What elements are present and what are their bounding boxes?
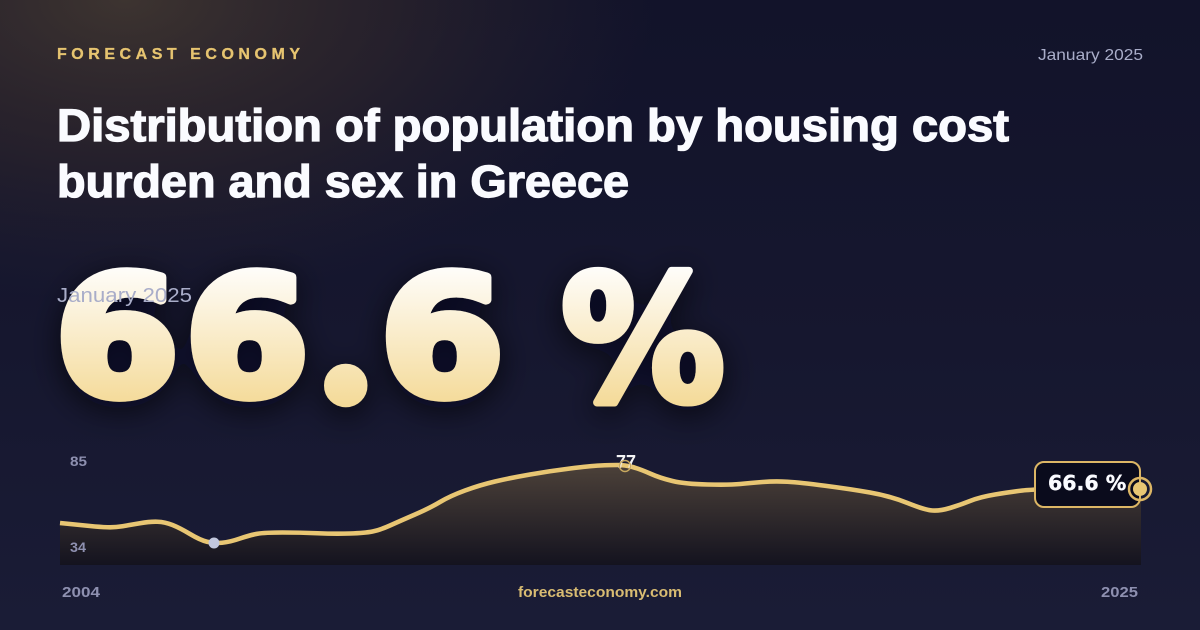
value callout: 66.6 % <box>1048 471 1126 495</box>
min marker <box>208 538 220 548</box>
axis max label: 85 <box>70 453 87 469</box>
end year: 2025 <box>1101 584 1138 601</box>
area under line <box>60 465 1141 565</box>
trend line <box>60 465 1140 543</box>
date top right: January 2025 <box>1038 47 1143 64</box>
big value <box>55 170 725 460</box>
title: burden and sex in Greece <box>57 156 629 207</box>
peak label: 77 <box>616 452 636 472</box>
end marker <box>1129 478 1151 500</box>
title <box>57 100 1009 207</box>
source site: forecasteconomy.com <box>518 584 682 601</box>
start year: 2004 <box>62 584 101 601</box>
big value: 6 <box>55 243 179 434</box>
big value: . <box>313 170 378 460</box>
chart <box>60 452 1151 565</box>
big value: 6 <box>380 243 504 434</box>
peak marker <box>620 460 630 472</box>
brand label: FORECAST ECONOMY <box>57 46 300 63</box>
date overlapping value: January 2025 <box>57 285 192 307</box>
title: Distribution of population by housing cost <box>57 100 1009 151</box>
value callout <box>1035 462 1140 507</box>
big value: % <box>561 238 725 441</box>
axis min label: 34 <box>70 539 86 555</box>
big value: 6 <box>185 243 309 434</box>
